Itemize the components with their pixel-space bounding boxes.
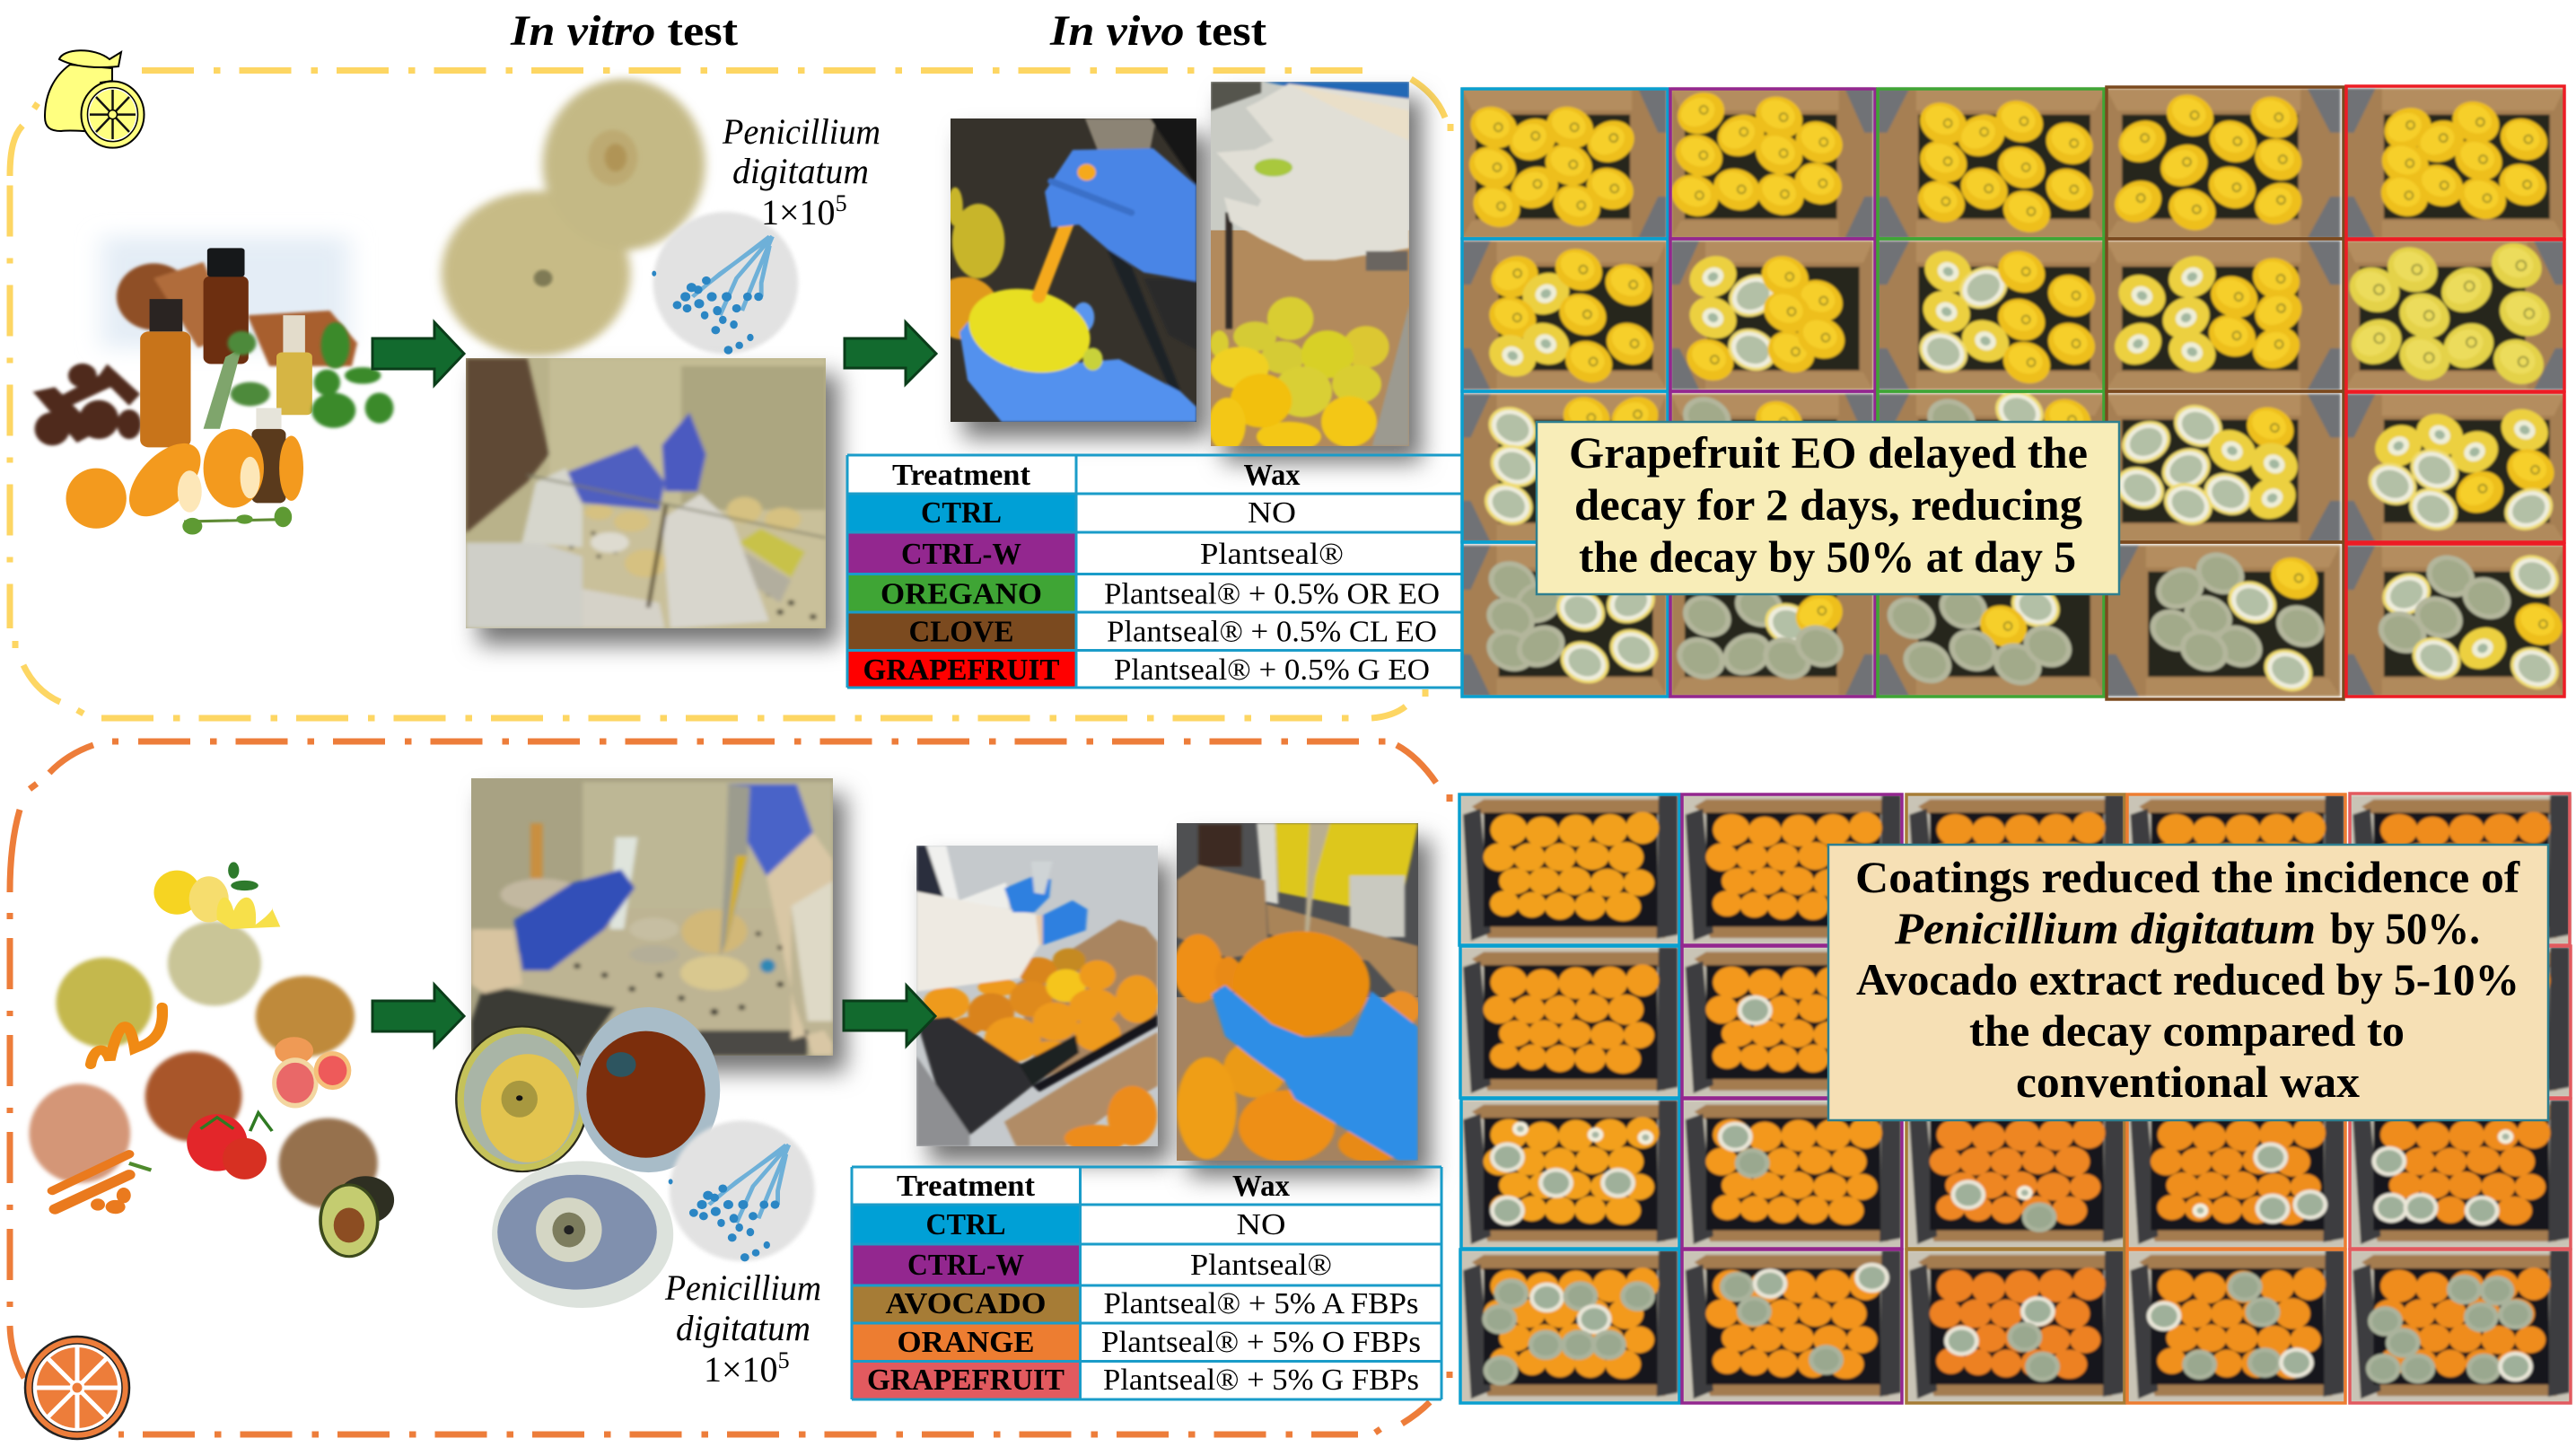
row: column headers: [852, 1167, 1290, 1205]
callout: coatings and avocado extract result: Penicillium digitatum: [1894, 903, 2316, 953]
photo: inoculation in laminar hood, orange section: [471, 778, 833, 1056]
photo: CLOVE lemons day 3: [2106, 394, 2340, 542]
photo: ORANGE oranges day 3: [2127, 1100, 2345, 1248]
row: CTRL: CTRL: [921, 496, 1002, 530]
row: column headers: Wax: [1244, 459, 1300, 492]
callout: coatings and avocado extract result: [1828, 845, 2548, 1120]
photo: CTRL oranges day 5: [1460, 1250, 1679, 1403]
photo: OREGANO lemons day 5: [1877, 545, 2106, 697]
petri dishes: orange in vitro assays: [456, 1007, 720, 1308]
photo: CLOVE lemons day 1: [2106, 87, 2340, 239]
arrow: powders to in vitro: [372, 985, 464, 1047]
row: column headers: Treatment: [897, 1170, 1036, 1203]
photo: GRAPEFRUIT lemons day 5: [2344, 545, 2569, 697]
callout: coatings and avocado extract result: the decay compared to: [1969, 1005, 2405, 1056]
photo: CTRL-W lemons day 3: [1671, 390, 1873, 542]
photo: GRAPEFRUIT oranges day 5: [2350, 1250, 2571, 1403]
columns 1 to 3 of orange boxes: [1460, 794, 2125, 1403]
photo: applying coating to an orange: [1173, 823, 1420, 1162]
photo: OREGANO lemons day 3: [1877, 383, 2106, 542]
photo: CTRL-W lemons day 2: [1671, 241, 1873, 390]
photo: inoculation in laminar hood, lemon section: [466, 358, 826, 628]
photo: GRAPEFRUIT oranges day 2: [2350, 947, 2571, 1097]
photo: CTRL lemons day 1: [1462, 89, 1667, 239]
photo: wounding oranges in a box: [916, 846, 1159, 1152]
row: CTRL-W: Plantseal®: [1190, 1249, 1332, 1282]
photo: OREGANO lemons day 2: [1877, 241, 2106, 390]
photo: CTRL oranges day 1: [1460, 794, 1679, 944]
photo: CTRL-W oranges day 2: [1682, 947, 1902, 1097]
dish: yellow extract: [456, 1026, 588, 1171]
heading: in vivo test: In vivo test: [1049, 7, 1266, 55]
row: CTRL: CTRL: [926, 1208, 1005, 1241]
icon: lemon with slice: [45, 50, 144, 148]
illustration: fruit by-product powders: [29, 862, 394, 1257]
callout: coatings and avocado extract result: Coatings reduced the incidence of: [1855, 852, 2520, 902]
photo: OREGANO lemons day 1: [1877, 89, 2106, 240]
photo: CTRL-W oranges day 3: [1682, 1100, 1902, 1248]
row: ORANGE: [852, 1323, 1421, 1361]
row: CTRL: [852, 1205, 1285, 1244]
row: column headers: Wax: [1232, 1170, 1290, 1203]
photo: CTRL-W oranges day 5: [1682, 1250, 1902, 1403]
photo: AVOCADO oranges day 1: [1906, 794, 2125, 944]
label: Penicillium digitatum inoculum, lemon section: Penicillium: [722, 111, 881, 152]
photo: wounding a lemon with gloved hands: [931, 118, 1196, 422]
illustration: Penicillium conidiophore, orange section: [669, 1120, 815, 1261]
heading: in vitro test: In vitro test: [510, 7, 738, 55]
dish: brown extract: [577, 1007, 720, 1172]
callout: grapefruit EO result: the decay by 50% at day 5: [1579, 531, 2076, 582]
photo: CLOVE lemons day 5: [2106, 545, 2340, 699]
row: GRAPEFRUIT: Plantseal® + 0.5% G EO: [1114, 653, 1430, 687]
table: orange treatments: [852, 1167, 1441, 1399]
photo: ORANGE oranges day 2: [2127, 947, 2345, 1097]
row: CTRL: NO: [1248, 496, 1296, 530]
arrow: in vitro to in vivo, lemon: [845, 322, 936, 384]
row: AVOCADO: AVOCADO: [885, 1287, 1047, 1320]
photo: GRAPEFRUIT oranges day 1: [2350, 794, 2571, 944]
row: CLOVE: Plantseal® + 0.5% CL EO: [1107, 616, 1437, 648]
row: OREGANO: Plantseal® + 0.5% OR EO: [1104, 578, 1440, 610]
columns 4 and 5 of lemon boxes: [2106, 87, 2569, 699]
row: OREGANO: OREGANO: [881, 578, 1042, 610]
label: Penicillium digitatum inoculum, orange section: 5: [778, 1347, 790, 1373]
row: CTRL-W: CTRL-W: [907, 1249, 1024, 1282]
callout: grapefruit EO result: [1537, 422, 2119, 594]
photo: CTRL lemons day 2: [1462, 241, 1667, 390]
row: CLOVE: [847, 612, 1437, 650]
photo: CTRL lemons day 5: [1462, 545, 1667, 697]
row: ORANGE: ORANGE: [898, 1326, 1034, 1359]
arrow: oils to in vitro: [372, 322, 464, 385]
dish: control colony: [492, 1161, 673, 1308]
photo: CTRL-W oranges day 1: [1682, 794, 1902, 944]
row: ORANGE: Plantseal® + 5% O FBPs: [1101, 1326, 1421, 1359]
label: Penicillium digitatum inoculum, lemon section: 5: [836, 190, 847, 216]
photo: CLOVE lemons day 2: [2106, 241, 2340, 390]
row: CTRL-W: CTRL-W: [901, 538, 1021, 571]
photo: ORANGE oranges day 1: [2127, 794, 2345, 944]
label: Penicillium digitatum inoculum, orange section: 1×10: [704, 1349, 778, 1390]
arrow: in vitro to in vivo, orange: [844, 986, 935, 1046]
row: column headers: Treatment: [892, 459, 1031, 492]
label: Penicillium digitatum inoculum, orange section: digitatum: [676, 1308, 810, 1348]
photo: CTRL-W lemons day 5: [1670, 545, 1873, 697]
callout: coatings and avocado extract result: conventional wax: [2016, 1057, 2360, 1107]
row: AVOCADO: Plantseal® + 5% A FBPs: [1104, 1287, 1418, 1320]
row: GRAPEFRUIT: GRAPEFRUIT: [863, 653, 1060, 687]
columns 1 to 3 of lemon boxes: [1462, 85, 2106, 697]
photo: GRAPEFRUIT lemons day 2: [2342, 235, 2564, 392]
callout: grapefruit EO result: Grapefruit EO delayed the: [1569, 427, 2088, 478]
row: GRAPEFRUIT: [847, 650, 1430, 688]
row: GRAPEFRUIT: [852, 1361, 1419, 1399]
colored treatment borders on lemon grid: [1462, 86, 2564, 699]
row: CTRL-W: Plantseal®: [1200, 538, 1344, 571]
row: CTRL: [847, 494, 1296, 532]
photo: CTRL oranges day 2: [1460, 947, 1679, 1097]
row: OREGANO: [847, 574, 1440, 612]
label: Penicillium digitatum inoculum, lemon section: [722, 111, 881, 232]
photo: GRAPEFRUIT lemons day 3: [2344, 394, 2564, 542]
yellow dash-dot frame: lemon section: [10, 70, 1450, 718]
icon: orange slice: [25, 1337, 129, 1439]
callout: coatings and avocado extract result: by 50%.: [2330, 903, 2480, 953]
photo: GRAPEFRUIT oranges day 3: [2350, 1100, 2571, 1248]
label: Penicillium digitatum inoculum, lemon section: digitatum: [732, 151, 869, 191]
colored treatment borders on orange grid: [1459, 794, 2571, 1403]
row: column headers: [847, 455, 1300, 494]
label: Penicillium digitatum inoculum, orange section: Penicillium: [664, 1267, 821, 1308]
row: AVOCADO: [852, 1285, 1418, 1323]
table: lemon treatments: [847, 455, 1462, 688]
illustration: Penicillium conidiophore, lemon section: [652, 212, 798, 355]
label: Penicillium digitatum inoculum, orange section: [664, 1267, 821, 1390]
photo grid: orange decay by treatment and day: [1459, 794, 2571, 1403]
row: CTRL-W: [847, 532, 1344, 574]
photo grid: lemon decay by treatment and day: [1462, 85, 2569, 699]
photo: CTRL-W lemons day 1: [1665, 85, 1873, 239]
row: CLOVE: CLOVE: [908, 616, 1014, 648]
photo: ORANGE oranges day 5: [2127, 1250, 2345, 1403]
photo: AVOCADO oranges day 5: [1906, 1250, 2125, 1403]
row: GRAPEFRUIT: Plantseal® + 5% G FBPs: [1103, 1364, 1419, 1397]
illustration: essential oils, spices and peel: [33, 236, 393, 535]
photo: CTRL oranges day 3: [1460, 1100, 1679, 1248]
photo: CTRL lemons day 3: [1462, 390, 1667, 542]
photo: AVOCADO oranges day 3: [1906, 1100, 2125, 1248]
row: CTRL-W: [852, 1244, 1332, 1285]
row: GRAPEFRUIT: GRAPEFRUIT: [867, 1364, 1065, 1397]
label: Penicillium digitatum inoculum, lemon section: 1×10: [761, 192, 836, 232]
callout: grapefruit EO result: decay for 2 days, reducing: [1574, 479, 2082, 530]
photo: applying coating to lemons in a box: [1209, 82, 1409, 452]
photo: GRAPEFRUIT lemons day 1: [2344, 89, 2564, 239]
photo: AVOCADO oranges day 2: [1906, 947, 2125, 1097]
callout: coatings and avocado extract result: Avocado extract reduced by 5-10%: [1856, 954, 2519, 1004]
petri dishes with fungal growth: lemon in vitro: [442, 79, 705, 356]
orange dash-dot frame: orange section: [10, 741, 1450, 1434]
row: CTRL: NO: [1237, 1208, 1285, 1241]
columns 4 and 5 of orange boxes: [2127, 794, 2571, 1403]
